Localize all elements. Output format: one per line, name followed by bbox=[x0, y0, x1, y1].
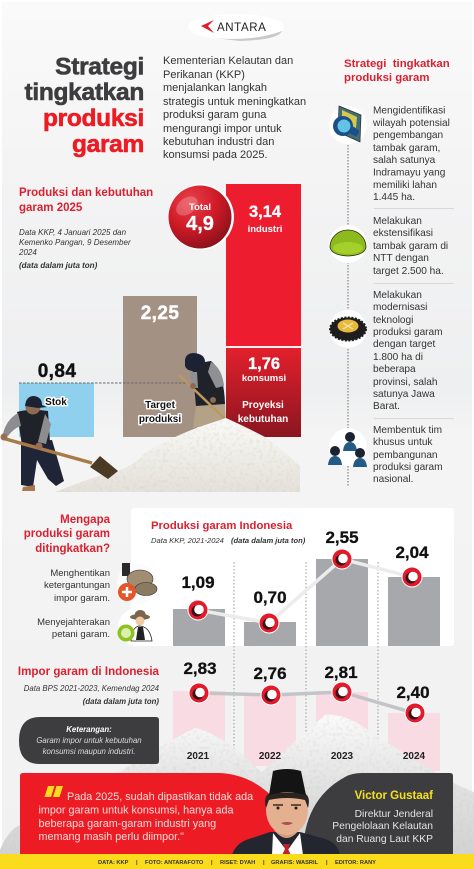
heading: strategi bbox=[344, 58, 450, 84]
strategy text blocks: nasional. bbox=[373, 474, 413, 485]
values: impor bbox=[183, 659, 430, 702]
footer credits: | bbox=[136, 860, 138, 866]
values: impor: 2,81 bbox=[324, 663, 358, 682]
heading: produksi dan kebutuhan: garam 2025 bbox=[19, 202, 83, 214]
source note: 2024 bbox=[18, 248, 37, 257]
title: garam bbox=[72, 131, 144, 158]
footer credits: | bbox=[326, 860, 328, 866]
bar chart: produksi 2021-2024 bbox=[173, 559, 440, 646]
values: produksi bbox=[181, 528, 429, 607]
years: 2023 bbox=[331, 751, 354, 762]
panel: speaker bbox=[303, 773, 453, 855]
reasons text: Menyejahterakan bbox=[37, 617, 110, 628]
badge: total: Total bbox=[189, 202, 211, 213]
label: target produksi bbox=[139, 400, 181, 425]
title bbox=[24, 54, 144, 158]
heading: impor garam: Data BPS 2021-2023, Kemendag 2024 bbox=[24, 684, 160, 693]
heading: mengapa: Mengapa bbox=[60, 514, 111, 526]
intro text: mengurangi impor untuk bbox=[163, 123, 282, 135]
heading: impor garam bbox=[18, 665, 160, 706]
heading: produksi garam indonesia bbox=[151, 520, 306, 545]
title: tingkatkan bbox=[24, 79, 144, 106]
heading: strategi: produksi garam bbox=[344, 72, 429, 84]
strategy text blocks: dengan target bbox=[373, 339, 435, 350]
footer credits: | bbox=[263, 860, 265, 866]
strategy text blocks: Melakukan bbox=[373, 216, 422, 227]
bar: stok: 0,84 bbox=[38, 361, 76, 382]
intro text: menjalankan langkah bbox=[163, 82, 267, 94]
values: produksi: 2,04 bbox=[395, 543, 429, 562]
bar: konsumsi bbox=[226, 348, 301, 437]
values: impor: 2,76 bbox=[253, 664, 287, 683]
logo: Antara: ANTARA bbox=[217, 22, 266, 34]
values: impor: 2,83 bbox=[183, 659, 217, 678]
values: impor: 2,40 bbox=[396, 683, 430, 702]
panel: quote: Pada 2025, sudah dipastikan tidak ada bbox=[67, 791, 253, 803]
panel: quote: memang masih perlu diimpor." bbox=[38, 831, 184, 843]
bar chart: produksi dan kebutuhan bbox=[19, 184, 301, 437]
reasons text: Menghentikan bbox=[50, 568, 110, 579]
label: target produksi: produksi bbox=[139, 414, 181, 425]
icon: team bbox=[328, 428, 367, 467]
values: produksi: 2,55 bbox=[325, 528, 359, 547]
values: produksi: 1,09 bbox=[181, 573, 215, 592]
source note: Data KKP, 4 Januari 2025 dan bbox=[19, 228, 127, 237]
intro text: kebutuhan industri dan bbox=[163, 136, 274, 148]
reasons text: impor garam. bbox=[54, 593, 110, 604]
source note: (data dalam juta ton) bbox=[19, 261, 98, 270]
strategy text blocks: 1.445 ha. bbox=[373, 192, 415, 203]
bar: stok bbox=[19, 361, 94, 437]
badge: total bbox=[168, 184, 234, 250]
heading: produksi dan kebutuhan bbox=[19, 187, 153, 214]
bar: target produksi: 2,25 bbox=[141, 303, 179, 324]
years: 2022 bbox=[259, 751, 282, 762]
grid lines bbox=[234, 562, 378, 760]
panel: produksi garam bbox=[131, 508, 454, 646]
strategy text blocks: pembangunan bbox=[373, 450, 438, 461]
heading: strategi: Strategi tingkatkan bbox=[344, 58, 450, 70]
icon: green dome bbox=[329, 225, 367, 263]
strategy text blocks: target 2.500 ha. bbox=[373, 266, 444, 277]
strategy text blocks bbox=[372, 106, 454, 485]
strategy text blocks: ekstensifikasi bbox=[373, 228, 433, 239]
strategy text blocks: Mengidentifikasi bbox=[373, 106, 445, 116]
values: produksi: 0,70 bbox=[253, 588, 287, 607]
footer credits: EDITOR: RANY bbox=[335, 860, 376, 866]
heading: produksi garam indonesia: Produksi garam Indonesia bbox=[151, 520, 293, 532]
bar: target produksi bbox=[123, 296, 197, 437]
bar chart: impor 2021-2024 bbox=[173, 691, 440, 771]
heading: mengapa: produksi garam bbox=[24, 528, 110, 540]
footer credits: RISET: DYAH bbox=[220, 860, 255, 866]
strategy text blocks: Indramayu yang bbox=[373, 168, 445, 178]
years bbox=[187, 751, 426, 762]
intro text: Perikanan (KKP) bbox=[163, 69, 245, 81]
badge: total: 4,9 bbox=[186, 213, 214, 235]
icon: farmer bbox=[118, 608, 156, 646]
intro text: konsumsi pada 2025. bbox=[163, 149, 268, 161]
strategy text blocks: beberapa bbox=[373, 364, 416, 375]
strategy text blocks: Membentuk tim bbox=[373, 425, 442, 436]
panel: speaker: dan Ruang Laut KKP bbox=[336, 834, 433, 845]
heading: produksi garam indonesia: Data KKP, 2021-2024 bbox=[151, 536, 224, 545]
footer credits bbox=[0, 854, 474, 869]
icon: tire bbox=[329, 310, 367, 348]
label: target produksi: Target bbox=[145, 400, 176, 411]
strategy text blocks: teknologi bbox=[373, 315, 413, 326]
bar: konsumsi: 1,76 bbox=[248, 355, 280, 373]
panel: quote bbox=[20, 773, 280, 855]
source note bbox=[18, 228, 131, 270]
strategy text blocks: memiliki lahan bbox=[373, 180, 437, 191]
footer credits: | bbox=[211, 860, 213, 866]
reasons text: ketergantungan bbox=[44, 580, 110, 591]
icon: quote mark bbox=[44, 786, 63, 797]
panel: speaker: Pengelolaan Kelautan bbox=[332, 821, 433, 832]
callout: keterangan: Garam impor untuk kebutuhan bbox=[36, 736, 142, 745]
panel: quote: beberapa garam-garam industri yang bbox=[38, 818, 216, 830]
years: 2021 bbox=[187, 751, 210, 762]
icon: stop import bbox=[117, 563, 157, 604]
callout: keterangan: Keterangan: bbox=[66, 725, 112, 734]
data points: impor bbox=[188, 682, 426, 724]
strategy text blocks: produksi garam bbox=[373, 462, 443, 473]
salt mounds bbox=[0, 715, 474, 854]
photo: left worker bbox=[0, 396, 118, 491]
years: 2024 bbox=[403, 751, 426, 762]
strategy text blocks: 1.800 ha di bbox=[373, 352, 423, 363]
photo: right worker bbox=[179, 353, 226, 428]
strategy text blocks: produksi garam bbox=[373, 327, 443, 338]
strategy text blocks: khusus untuk bbox=[373, 437, 433, 448]
bar: konsumsi: kebutuhan bbox=[238, 414, 288, 425]
heading: impor garam: (data dalam juta ton) bbox=[83, 697, 159, 706]
footer credits: DATA: KKP bbox=[98, 860, 129, 866]
bar: konsumsi: Proyeksi bbox=[242, 400, 284, 411]
heading: mengapa: ditingkatkan? bbox=[35, 543, 110, 555]
heading: mengapa bbox=[24, 514, 111, 555]
title: produksi bbox=[43, 105, 144, 132]
strategy text blocks: salah satunya bbox=[373, 155, 436, 166]
bar: industri: 3,14 bbox=[249, 203, 282, 221]
strategy text blocks: Melakukan bbox=[373, 290, 422, 301]
intro text: produksi garam guna bbox=[163, 109, 267, 121]
heading: produksi garam indonesia: (data dalam juta ton) bbox=[231, 536, 306, 545]
heading: produksi dan kebutuhan: Produksi dan kebutuhan bbox=[19, 187, 153, 199]
strategy text blocks: satunya Jawa bbox=[373, 389, 435, 400]
heading: impor garam: Impor garam di Indonesia bbox=[18, 665, 160, 678]
icon: map and magnifier bbox=[329, 106, 367, 144]
data points: produksi bbox=[188, 548, 422, 634]
strategy text blocks: tambak garam di bbox=[373, 241, 448, 252]
reasons text: petani garam. bbox=[52, 629, 110, 640]
bar: konsumsi: konsumsi bbox=[242, 373, 286, 384]
strategy text blocks: Barat. bbox=[373, 401, 400, 412]
strategy timeline bbox=[328, 106, 367, 486]
bar: industri: industri bbox=[248, 224, 282, 235]
label: stok: Stok bbox=[45, 397, 67, 408]
panel: quote: impor garam untuk konsumsi, hanya ada bbox=[38, 804, 234, 816]
bar: industri bbox=[226, 184, 301, 346]
strategy text blocks: modernisasi bbox=[373, 302, 427, 313]
logo: Antara bbox=[188, 14, 284, 41]
portrait: Victor Gustaaf bbox=[232, 769, 340, 855]
panel: speaker: Direktur Jenderal bbox=[355, 809, 433, 820]
title: Strategi bbox=[55, 54, 144, 80]
intro text: Kementerian Kelautan dan bbox=[163, 55, 293, 67]
strategy text blocks: tambak garam, bbox=[373, 143, 440, 154]
footer credits: GRAFIS: WASRIL bbox=[271, 860, 319, 866]
intro text bbox=[163, 55, 306, 161]
callout: keterangan: konsumsi maupun industri. bbox=[43, 747, 135, 756]
photo: salt pile bbox=[55, 418, 300, 492]
strategy text blocks: provinsi, salah bbox=[373, 377, 438, 388]
reasons text bbox=[37, 568, 110, 640]
source note: Kemenko Pangan, 9 Desember bbox=[19, 238, 131, 247]
panel: speaker: Victor Gustaaf bbox=[355, 790, 433, 802]
strategy text blocks: NTT dengan bbox=[373, 253, 429, 264]
callout: keterangan bbox=[19, 717, 159, 764]
strategy text blocks: wilayah potensial bbox=[372, 118, 450, 129]
footer credits: FOTO: ANTARAFOTO bbox=[145, 860, 204, 866]
strategy text blocks: pengembangan bbox=[373, 130, 443, 141]
intro text: strategis untuk meningkatkan bbox=[163, 96, 306, 108]
